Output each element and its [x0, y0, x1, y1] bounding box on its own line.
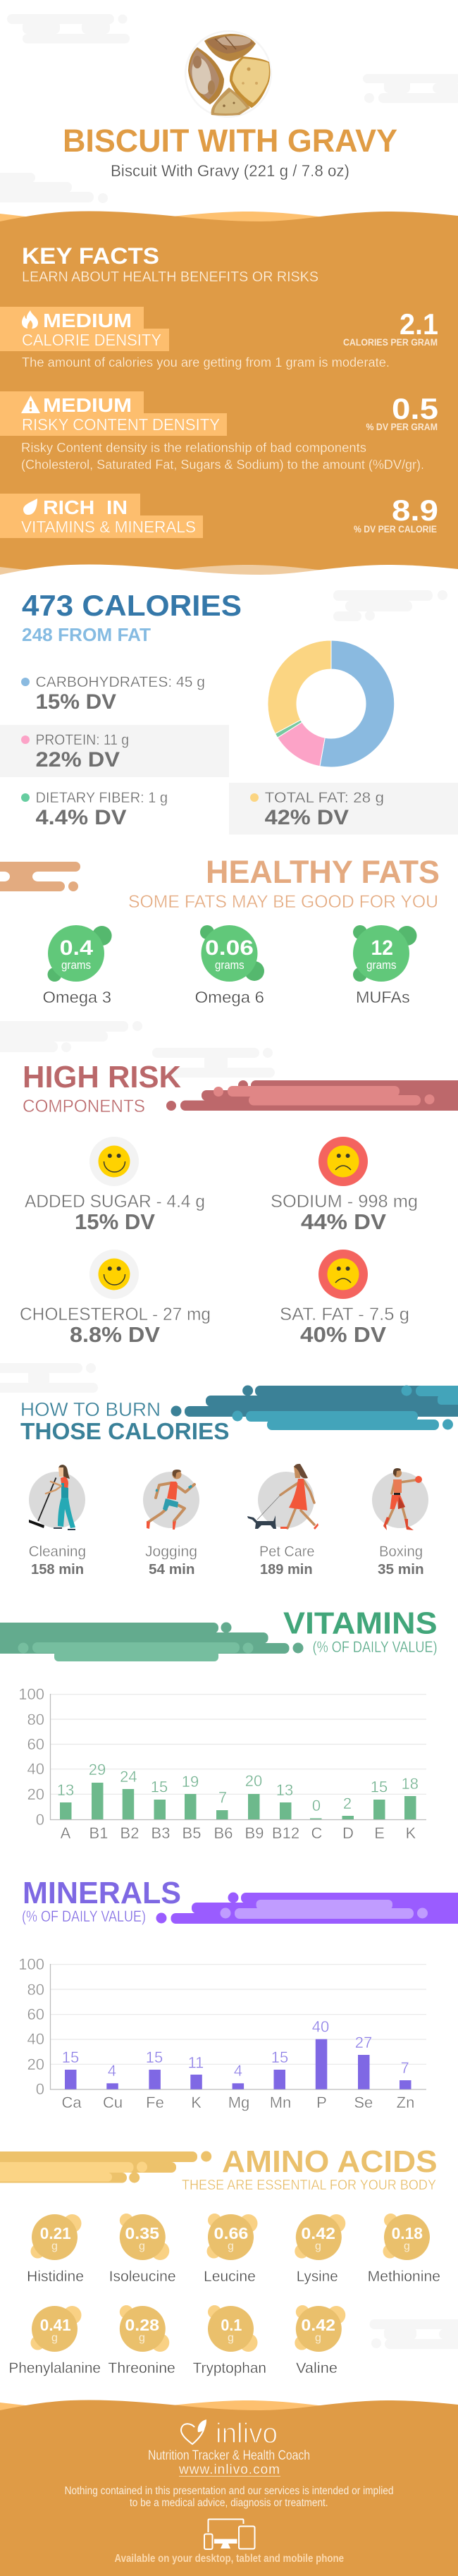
bar chart: minerals: 15 [271, 2049, 288, 2066]
legend: dietary fiber: 4.4% DV [35, 806, 127, 829]
banner: how to burn [171, 1385, 458, 1430]
bar chart: vitamins: 40 [27, 1760, 44, 1778]
rating label: RICH IN [43, 496, 128, 518]
legend: total fat: TOTAL FAT: 28 g [265, 790, 384, 806]
bar chart: vitamins: B2 [120, 1824, 139, 1842]
activity: boxing: Boxing [379, 1544, 423, 1560]
bar chart: minerals: Zn [397, 2094, 414, 2111]
activity: jogging: 54 min [149, 1562, 194, 1577]
heading: key facts: KEY FACTS [22, 243, 159, 269]
amino: leucine: 0.66 [214, 2224, 248, 2242]
fat: omega 6: Omega 6 [194, 988, 264, 1006]
activity: jogging: Jogging [145, 1544, 197, 1560]
amino: tryptophan: Tryptophan [193, 2360, 266, 2376]
amino: valine: Valine [296, 2360, 338, 2376]
bar chart: vitamins: 80 [27, 1711, 44, 1728]
bar chart: minerals: 4 [108, 2062, 116, 2080]
bar chart: minerals: 40 [312, 2018, 329, 2036]
bar chart: minerals: Mg [228, 2094, 249, 2111]
value: 8.9 [392, 494, 438, 527]
description: The amount of calories you are getting from 1 gram is moderate. [22, 355, 390, 370]
activity: jogging [143, 1470, 199, 1577]
bar chart: vitamins: B1 [89, 1824, 108, 1842]
amino: methionine: Methionine [368, 2269, 440, 2285]
description: (Cholesterol, Saturated Fat, Sugars & Sodium) to the amount (%DV/gr). [21, 458, 424, 472]
bar chart: vitamins: 7 [218, 1788, 227, 1807]
heading: those calories: THOSE CALORIES [20, 1418, 230, 1444]
amino: methionine: g [404, 2240, 410, 2252]
heading: calories: 473 CALORIES [22, 589, 242, 622]
activity: cleaning [29, 1465, 86, 1577]
bar chart: vitamins: 2 [343, 1795, 352, 1812]
heading: high risk: HIGH RISK [23, 1060, 181, 1094]
category label: RISKY CONTENT DENSITY [22, 415, 220, 434]
icon: leaf [23, 499, 37, 515]
amino: leucine: g [228, 2240, 234, 2252]
bar chart: minerals: Se [354, 2094, 373, 2111]
amino: threonine: Threonine [108, 2360, 175, 2376]
vitamins and minerals block [0, 494, 438, 538]
amino: threonine: 0.28 [125, 2316, 159, 2334]
amino: leucine: Leucine [204, 2269, 256, 2285]
heading: how to burn: HOW TO BURN [20, 1398, 161, 1420]
amino: valine: g [315, 2332, 321, 2344]
amino: lysine: Lysine [297, 2269, 338, 2285]
bar chart: vitamins: 15 [371, 1778, 388, 1795]
amino: valine [295, 2305, 345, 2376]
bar chart: minerals: 60 [27, 2006, 44, 2023]
banner: minerals [156, 1893, 458, 1924]
bar chart: vitamins: 100 [18, 1685, 44, 1703]
availability note: Available on your desktop, tablet and mobile phone [114, 2553, 344, 2565]
activity: pet care: 189 min [260, 1562, 313, 1577]
risk item: added sugar [25, 1137, 205, 1234]
amino: phenylalanine [8, 2306, 101, 2376]
legend: carbohydrates [21, 674, 205, 714]
banner: high risk [166, 1080, 458, 1111]
bar chart: vitamins: 13 [57, 1781, 74, 1799]
bar chart: vitamins: 18 [401, 1775, 419, 1793]
panel: key facts [0, 211, 458, 586]
amino: isoleucine: g [139, 2240, 145, 2252]
amino: histidine: 0.21 [40, 2224, 71, 2242]
amino: isoleucine: 0.35 [125, 2224, 159, 2242]
risk item: cholesterol: CHOLESTEROL - 27 mg [20, 1305, 211, 1324]
amino: tryptophan [193, 2305, 266, 2376]
heading: healthy fats: HEALTHY FATS [206, 854, 440, 890]
bar chart: vitamins: 15 [151, 1778, 168, 1795]
bar chart: vitamins: C [311, 1824, 322, 1842]
bar chart: minerals: 20 [27, 2056, 44, 2073]
risk item: added sugar: 15% DV [75, 1210, 156, 1234]
disclaimer: to be a medical advice, diagnosis or treatment. [130, 2497, 328, 2509]
unit: % DV PER GRAM [366, 422, 438, 432]
value: 2.1 [400, 307, 438, 341]
bar chart: minerals: 100 [18, 1955, 44, 1973]
bar chart: minerals: Fe [146, 2094, 164, 2111]
fat: omega 6: 0.06 [205, 936, 254, 960]
bar chart: vitamins: K [406, 1824, 416, 1842]
food photo: biscuits [185, 30, 272, 118]
bar chart: vitamins: A [61, 1824, 71, 1842]
illustration: woman sweeping [29, 1465, 85, 1530]
icon: warning triangle [21, 396, 40, 413]
risk item: saturated fat: 40% DV [300, 1323, 387, 1347]
legend: protein: 22% DV [35, 748, 120, 771]
risk item: sodium: 44% DV [301, 1210, 387, 1234]
bar chart: vitamins: 19 [182, 1773, 199, 1790]
risk item: sodium [271, 1137, 418, 1234]
amino: isoleucine [109, 2214, 176, 2285]
bar chart: vitamins: 24 [120, 1768, 137, 1786]
legend: dietary fiber: DIETARY FIBER: 1 g [35, 790, 168, 806]
banner: healthy fats [0, 862, 80, 891]
fat: omega 6: grams [215, 959, 245, 972]
legend: protein [0, 725, 229, 777]
bar chart: minerals: K [191, 2094, 202, 2111]
bar chart: minerals: 0 [36, 2080, 44, 2098]
fat: mufas [353, 925, 417, 1006]
heading: amino acids: AMINO ACIDS [222, 2144, 438, 2179]
illustration: boxer [372, 1468, 428, 1530]
bar chart: minerals [18, 1955, 426, 2111]
bar chart: vitamins [18, 1685, 426, 1842]
bar chart: vitamins: B6 [214, 1824, 233, 1842]
subheading: LEARN ABOUT HEALTH BENEFITS OR RISKS [22, 269, 318, 285]
bar chart: vitamins: 60 [27, 1735, 44, 1753]
bar chart: minerals: 40 [27, 2030, 44, 2048]
illustration: man running [143, 1470, 199, 1530]
rating label: MEDIUM [43, 310, 132, 331]
amino: lysine [295, 2214, 345, 2285]
icon: sad face [318, 1250, 368, 1299]
disclaimer [65, 2485, 393, 2509]
subheading: from fat: 248 FROM FAT [22, 624, 151, 645]
amino: tryptophan: g [228, 2332, 234, 2344]
amino: phenylalanine: g [51, 2332, 58, 2344]
icon: happy face [89, 1137, 139, 1186]
fat: omega 3 [42, 925, 112, 1006]
bar chart: minerals: P [316, 2094, 327, 2111]
activity: cleaning: 158 min [31, 1562, 84, 1577]
bar chart: vitamins: B3 [151, 1824, 170, 1842]
fat: omega 3: Omega 3 [42, 988, 111, 1006]
risk item: sodium: SODIUM - 998 mg [271, 1192, 418, 1211]
fat: omega 3: grams [61, 959, 91, 972]
bar chart: minerals: 80 [27, 1981, 44, 1998]
legend: carbohydrates: CARBOHYDRATES: 45 g [35, 674, 205, 690]
calorie density block [0, 307, 438, 370]
amino: isoleucine: Isoleucine [109, 2269, 176, 2285]
bar chart: vitamins: 29 [89, 1761, 106, 1778]
fat: mufas: grams [366, 959, 397, 972]
amino: histidine [27, 2214, 84, 2285]
title: BISCUIT WITH GRAVY [63, 123, 397, 159]
bar chart: minerals: Ca [62, 2094, 82, 2111]
bar chart: minerals: 7 [400, 2059, 409, 2077]
activity: boxing [372, 1468, 428, 1577]
disclaimer: Nothing contained in this presentation and our services is intended or implied [65, 2485, 393, 2497]
tagline: Nutrition Tracker & Health Coach [148, 2448, 310, 2463]
bar chart: minerals: Mn [270, 2094, 291, 2111]
icon: flame [22, 310, 38, 329]
amino: lysine: g [315, 2240, 321, 2252]
amino: lysine: 0.42 [301, 2224, 335, 2242]
activity: pet care: Pet Care [259, 1544, 314, 1560]
legend: dietary fiber [21, 790, 168, 829]
donut chart [268, 640, 395, 767]
bar chart: vitamins: D [342, 1824, 354, 1842]
bar chart: minerals: Cu [103, 2094, 123, 2111]
fat: omega 6 [194, 925, 264, 1006]
description [21, 441, 424, 472]
fat: mufas: 12 [371, 936, 393, 960]
logo wordmark: inlivo [216, 2418, 278, 2449]
category label: VITAMINS & MINERALS [21, 518, 196, 536]
subheading: SOME FATS MAY BE GOOD FOR YOU [128, 892, 438, 912]
bar chart: minerals: 15 [62, 2049, 79, 2066]
heading: minerals: MINERALS [23, 1876, 181, 1910]
icon: sad face [318, 1137, 368, 1186]
rating label: MEDIUM [43, 394, 132, 416]
legend: total fat [229, 783, 458, 835]
activity: boxing: 35 min [378, 1562, 424, 1577]
bar chart: vitamins: E [374, 1824, 385, 1842]
subheading: THESE ARE ESSENTIAL FOR YOUR BODY [182, 2178, 436, 2193]
subtitle: serving size: Biscuit With Gravy (221 g / 7.8 oz) [111, 161, 349, 180]
icon: devices [204, 2519, 255, 2549]
icon: happy face [89, 1250, 139, 1299]
risk item: cholesterol: 8.8% DV [70, 1323, 161, 1347]
bar chart: vitamins: B9 [245, 1824, 264, 1842]
logo: heart and leaf [181, 2419, 206, 2444]
fat: mufas: MUFAs [356, 988, 410, 1006]
risk item: added sugar: ADDED SUGAR - 4.4 g [25, 1192, 205, 1211]
amino: threonine [108, 2305, 175, 2376]
activity: pet care [247, 1464, 318, 1577]
heading: vitamins: VITAMINS [283, 1606, 438, 1640]
bar chart: vitamins: B5 [182, 1824, 201, 1842]
amino: histidine: Histidine [27, 2269, 84, 2285]
panel: footer [0, 2400, 458, 2576]
bar chart: vitamins: 0 [312, 1797, 321, 1814]
amino: phenylalanine: 0.41 [40, 2316, 71, 2334]
amino: phenylalanine: Phenylalanine [8, 2360, 101, 2376]
risk item: saturated fat [280, 1250, 409, 1347]
amino: leucine [204, 2214, 258, 2285]
subheading: (% OF DAILY VALUE) [22, 1907, 146, 1925]
banner: vitamins [0, 1622, 303, 1661]
bar chart: minerals: 27 [355, 2034, 372, 2051]
unit: % DV PER CALORIE [354, 524, 437, 535]
bar chart: vitamins: 20 [245, 1772, 262, 1790]
bar chart: vitamins: 20 [27, 1786, 44, 1803]
amino: methionine [368, 2214, 440, 2285]
legend: total fat: 42% DV [265, 806, 349, 829]
bar chart: vitamins: 13 [276, 1781, 293, 1799]
amino: histidine: g [51, 2240, 58, 2252]
fat: omega 3: 0.4 [60, 936, 93, 960]
risk item: cholesterol [20, 1250, 211, 1347]
amino: threonine: g [139, 2332, 145, 2344]
amino: methionine: 0.18 [392, 2224, 423, 2242]
unit: CALORIES PER GRAM [343, 337, 438, 348]
risk item: saturated fat: SAT. FAT - 7.5 g [280, 1305, 409, 1324]
bar chart: minerals: 15 [146, 2049, 163, 2066]
illustration: woman walking dog [247, 1464, 318, 1530]
description: Risky Content density is the relationship of bad components [21, 441, 366, 455]
amino: tryptophan: 0.1 [221, 2316, 242, 2334]
bar chart: vitamins: B12 [272, 1824, 299, 1842]
bar chart: vitamins: 0 [36, 1811, 44, 1829]
activity: cleaning: Cleaning [29, 1544, 86, 1560]
bar chart: minerals: 4 [234, 2062, 242, 2080]
legend: carbohydrates: 15% DV [35, 690, 116, 714]
value: 0.5 [392, 392, 438, 425]
category label: CALORIE DENSITY [22, 331, 161, 349]
banner: amino acids [0, 2151, 211, 2183]
amino: valine: 0.42 [301, 2316, 335, 2334]
bar chart: minerals: 11 [188, 2054, 204, 2072]
website link: www.inlivo.com [178, 2462, 280, 2477]
legend: protein: PROTEIN: 11 g [35, 732, 129, 748]
risky content density block [0, 391, 438, 472]
subheading: components: COMPONENTS [23, 1097, 145, 1116]
